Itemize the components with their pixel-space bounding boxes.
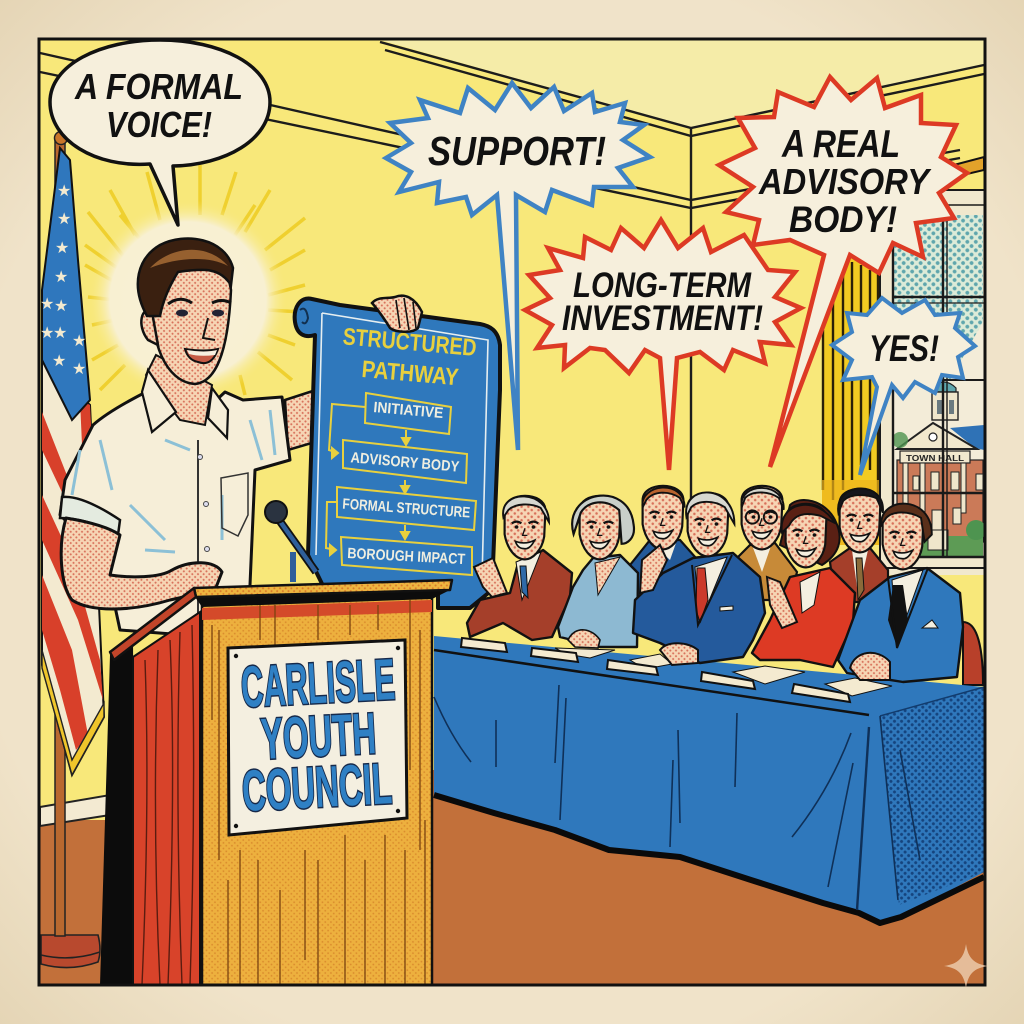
town hall building [892,382,986,556]
podium [100,580,452,985]
curtain [822,255,882,545]
forearm and hand [61,518,222,609]
burst: support: SUPPORT! [428,128,606,174]
burst: a real advisory body: ADVISORY [758,161,932,202]
burst: yes: YES! [869,328,939,369]
panelist: glasses [737,486,797,600]
sign [228,640,407,835]
microphone [265,501,316,582]
panelist: back left [630,486,696,610]
american flag: ★ [55,240,69,257]
bubble: a formal voice: VOICE! [106,104,212,145]
flow arrows [326,404,410,555]
flow step: formal structure: FORMAL STRUCTURE [342,496,471,522]
burst: long-term investment: INVESTMENT! [562,299,763,338]
bubble: a formal voice: A FORMAL [74,66,243,107]
american flag [40,132,104,968]
burst: a real advisory body: A REAL [781,123,900,166]
window with town hall view [880,190,986,575]
floor [40,770,984,985]
american flag: ★ [72,361,86,378]
podium top [110,580,452,660]
scroll title: STRUCTURED [342,323,478,362]
panelist: woman in light blue [558,496,638,648]
burst: yes [832,298,975,475]
table [434,636,984,923]
name plates and papers [461,638,892,702]
bubble: a formal voice [50,40,270,225]
american flag: ★ [57,183,71,200]
scroll: structured pathway [295,296,500,608]
burst: a real advisory body: BODY! [789,199,897,240]
american flag: ★ [40,296,54,313]
american flag: ★ [40,325,54,342]
shirt [60,390,290,640]
american flag: ★ [72,333,86,350]
right arm [285,388,322,450]
head [153,260,231,384]
label: town hall: TOWN HALL [906,453,964,463]
back row panelists [630,486,888,610]
sign: YOUTH [259,701,378,772]
flow step: borough impact [341,537,472,575]
sign: CARLISLE [239,647,397,720]
burst: a real advisory body [719,77,967,467]
hand on scroll [372,296,422,332]
burst: long-term investment: LONG-TERM [573,266,752,305]
sign: COUNCIL [240,751,394,824]
american flag: ★ [52,353,66,370]
american flag: ★ [57,211,71,228]
panelist: grey man in maroon [467,496,572,640]
room wall [40,40,984,830]
burst: support [386,83,650,450]
hair [138,239,233,316]
flow step: borough impact: BOROUGH IMPACT [347,545,466,568]
flow step: initiative [365,393,451,434]
panelist: man in blue [838,504,963,682]
speaker [60,239,322,640]
sparkle mark [944,944,988,988]
american flag: ★ [54,298,68,315]
scroll: structured pathway: PATHWAY [361,356,460,391]
front row panelists [467,492,963,682]
halo behind speaker [85,165,305,400]
flow step: advisory body: ADVISORY BODY [350,449,460,476]
chair [963,622,983,685]
panelist: grey man in navy [633,492,765,665]
face [168,299,231,363]
panelist: back right [830,488,888,605]
flow step: formal structure [337,487,476,530]
american flag: ★ [53,325,67,342]
neck [146,355,212,425]
burst: long-term investment [525,220,801,470]
flow step: initiative: INITIATIVE [373,399,444,422]
panelist: woman in red [752,500,855,667]
flow step: advisory body [343,440,467,483]
american flag: ★ [54,269,68,286]
